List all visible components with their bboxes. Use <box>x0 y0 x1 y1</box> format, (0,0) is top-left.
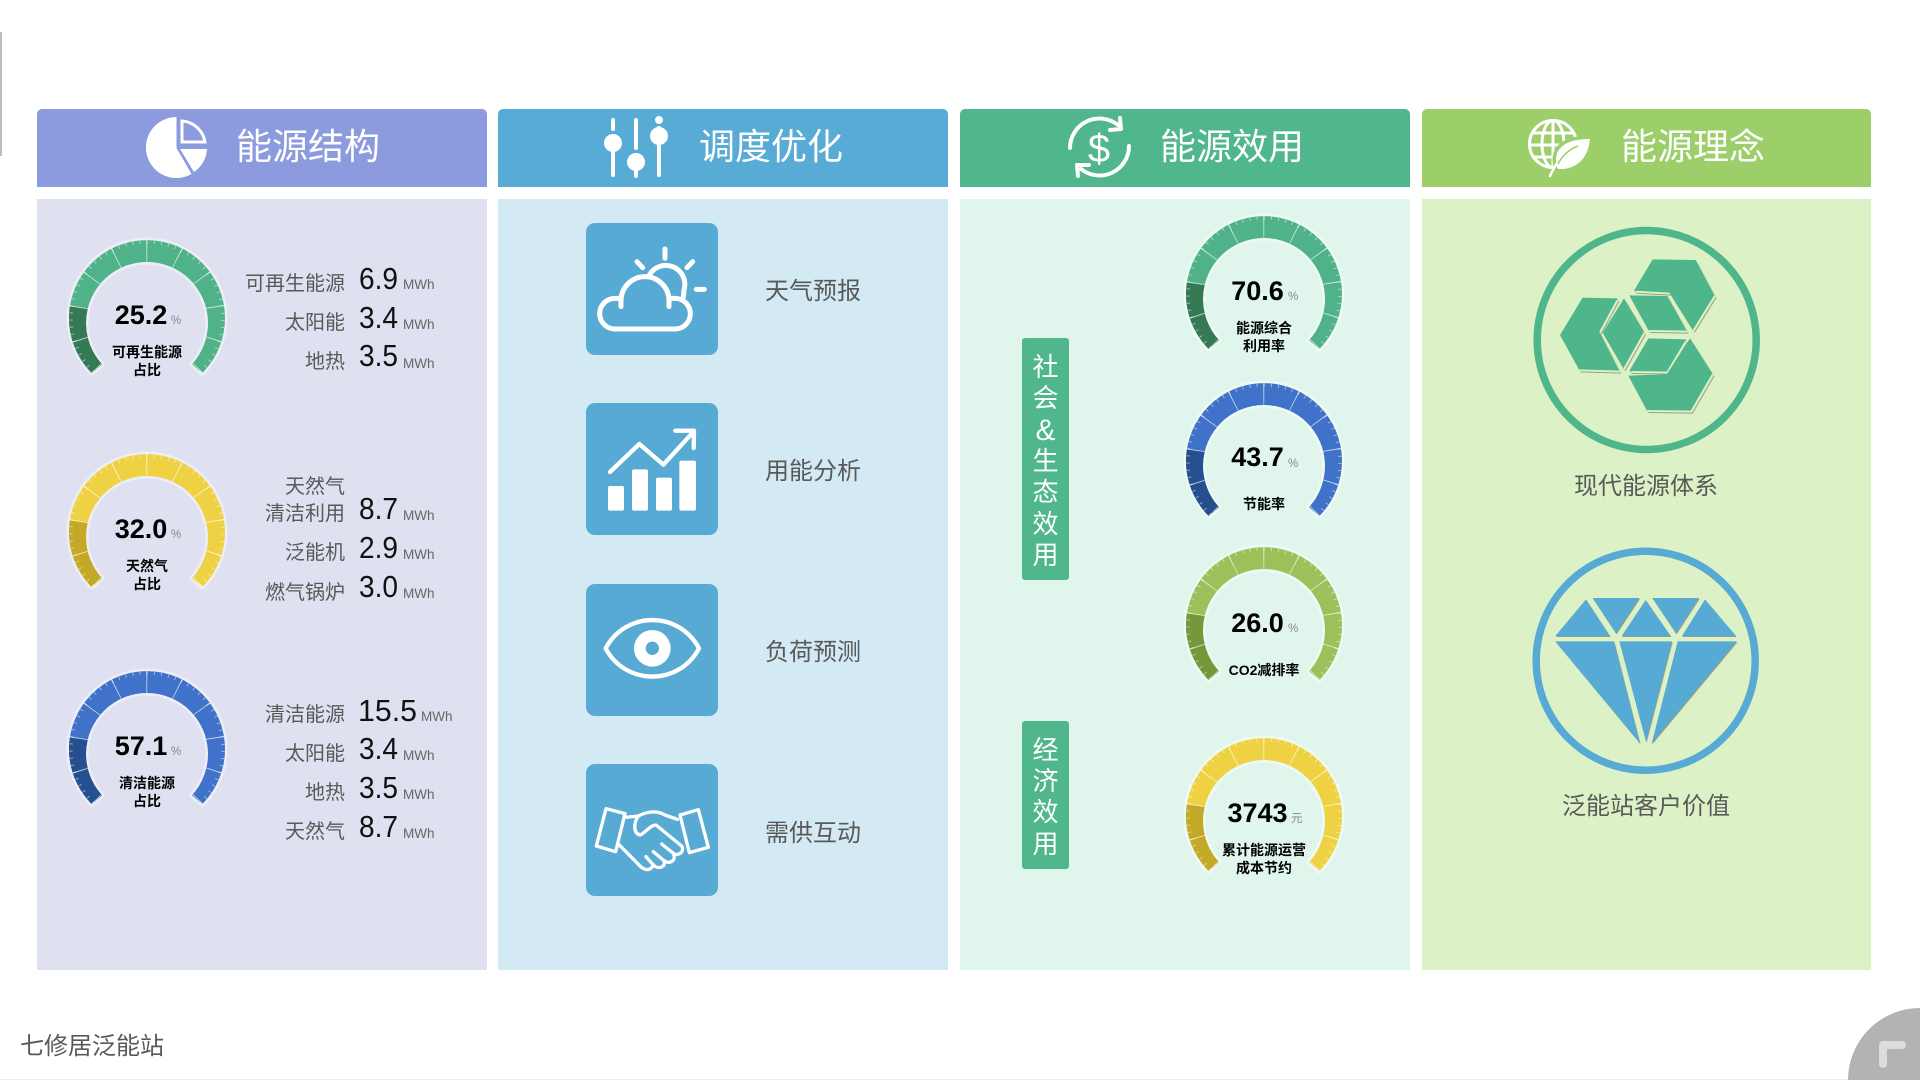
icon: globe and leaf <box>1529 120 1590 176</box>
data rows: renewable: 3.4 <box>359 300 398 335</box>
badge: social and ecological benefit: & <box>1035 414 1056 447</box>
gauge: cumulative cost saving <box>1157 709 1371 923</box>
gauge: clean energy share <box>40 642 254 856</box>
footer text: 七修居泛能站 <box>20 1033 164 1060</box>
badge: social and ecological benefit: 用 <box>1032 540 1059 570</box>
badge: economic benefit <box>1022 721 1069 869</box>
data rows: natural gas: 泛能机 <box>285 541 345 564</box>
label: weather forecast: 天气预报 <box>765 278 861 305</box>
data rows: renewable: 可再生能源 <box>245 272 345 295</box>
gauge: energy saving rate: 43.7 <box>1231 442 1284 472</box>
data rows: clean energy: 3.5 <box>359 770 398 805</box>
badge: social and ecological benefit: 社 <box>1032 352 1059 382</box>
badge: economic benefit: 用 <box>1032 829 1059 859</box>
data rows: renewable: MWh <box>403 356 434 371</box>
label: load forecast: 负荷预测 <box>765 639 861 666</box>
data rows: renewable: 3.5 <box>359 338 398 373</box>
panel: energy efficiency <box>960 109 1410 970</box>
heading: energy philosophy: 能源理念 <box>1621 126 1765 167</box>
data rows: renewable: MWh <box>403 317 434 332</box>
item: supply demand interaction <box>586 764 861 896</box>
gauge: natural gas share: 32.0 <box>115 514 167 544</box>
icon: rising bar chart <box>608 431 696 511</box>
data rows: clean energy: 15.5 <box>358 693 417 728</box>
icon: diamond <box>1555 598 1737 743</box>
data rows: clean energy: MWh <box>403 787 434 802</box>
data rows: natural gas: 清洁利用 <box>265 502 345 525</box>
header: energy efficiency <box>960 109 1410 187</box>
data rows: natural gas <box>265 475 434 604</box>
data rows: clean energy: MWh <box>421 709 452 724</box>
heading: energy efficiency: 能源效用 <box>1160 126 1304 167</box>
gauge: overall energy utilization: 70.6 <box>1231 276 1284 306</box>
gauge: overall energy utilization: 能源综合 <box>1236 320 1292 336</box>
data rows: clean energy: 3.4 <box>359 731 398 766</box>
gauge: cumulative cost saving: 元 <box>1291 813 1303 825</box>
badge: social and ecological benefit: 生 <box>1032 446 1059 476</box>
left edge marker <box>0 32 2 156</box>
item: customer value <box>1536 551 1755 820</box>
gauge: energy saving rate: % <box>1288 458 1298 470</box>
gauge: natural gas share: % <box>171 529 181 541</box>
icon: hexagon cubes <box>1560 259 1714 411</box>
data rows: renewable <box>245 261 434 373</box>
data rows: clean energy: 地热 <box>305 781 345 804</box>
icon: cloud and sun <box>600 249 704 329</box>
icon: handshake <box>596 809 708 870</box>
label: modern energy system: 现代能源体系 <box>1574 473 1718 500</box>
data rows: clean energy: 清洁能源 <box>265 703 345 726</box>
gauge: renewable share: % <box>171 315 181 327</box>
gauge: clean energy share: 57.1 <box>115 731 167 761</box>
gauge: CO2 reduction rate: 26.0 <box>1231 608 1284 638</box>
label: energy use analysis: 用能分析 <box>765 458 861 485</box>
gauge: cumulative cost saving: 成本节约 <box>1236 860 1292 876</box>
data rows: clean energy: MWh <box>403 748 434 763</box>
badge: social and ecological benefit: 态 <box>1032 477 1059 507</box>
item: weather forecast <box>586 223 861 355</box>
data rows: natural gas: 8.7 <box>359 491 398 526</box>
data rows: natural gas: 3.0 <box>359 569 398 604</box>
item: load forecast <box>586 584 861 716</box>
data rows: natural gas: 天然气 <box>285 475 345 498</box>
gauge: energy saving rate: 节能率 <box>1243 496 1285 512</box>
heading: energy structure: 能源结构 <box>236 126 380 167</box>
gauge: renewable share: 可再生能源 <box>112 344 182 360</box>
label: supply demand interaction: 需供互动 <box>765 820 861 847</box>
icon: sliders <box>606 118 666 176</box>
gauge: clean energy share: 清洁能源 <box>119 775 175 791</box>
corner logo <box>0 1008 1920 1080</box>
badge: social and ecological benefit: 会 <box>1032 383 1059 413</box>
gauge: overall energy utilization: 利用率 <box>1243 338 1285 354</box>
gauge: cumulative cost saving: 3743 <box>1227 798 1288 828</box>
badge: economic benefit: 效 <box>1032 797 1059 827</box>
panel: energy philosophy <box>1422 109 1871 970</box>
gauge: energy saving rate <box>1157 354 1371 568</box>
panel: dispatch optimization <box>498 109 948 970</box>
gauge: clean energy share: % <box>171 746 181 758</box>
data rows: clean energy: 天然气 <box>285 820 345 843</box>
gauge: overall energy utilization <box>1157 187 1371 401</box>
item: energy use analysis <box>586 403 861 535</box>
header: energy philosophy <box>1422 109 1871 187</box>
gauge: natural gas share: 天然气 <box>126 558 168 574</box>
data rows: natural gas: MWh <box>403 586 434 601</box>
panel: energy structure <box>37 109 487 970</box>
data rows: clean energy: MWh <box>403 826 434 841</box>
header: dispatch optimization <box>498 109 948 187</box>
gauge: renewable share: 25.2 <box>115 300 167 330</box>
badge: economic benefit: 经 <box>1032 735 1059 765</box>
icon: eye <box>606 620 699 677</box>
data rows: renewable: 太阳能 <box>285 311 345 334</box>
gauge: natural gas share: 占比 <box>133 576 161 592</box>
heading: dispatch optimization: 调度优化 <box>699 126 843 167</box>
badge: economic benefit: 济 <box>1032 766 1059 796</box>
badge: social and ecological benefit: 效 <box>1032 509 1059 539</box>
data rows: natural gas: MWh <box>403 508 434 523</box>
gauge: overall energy utilization: % <box>1288 291 1298 303</box>
gauge: clean energy share: 占比 <box>133 793 161 809</box>
data rows: renewable: 6.9 <box>359 261 398 296</box>
icon: pie chart <box>146 117 207 178</box>
data rows: clean energy: 太阳能 <box>285 742 345 765</box>
gauge: natural gas share <box>40 425 254 639</box>
data rows: renewable: MWh <box>403 277 434 292</box>
icon: dollar cycle <box>1070 118 1129 176</box>
item: modern energy system <box>1537 230 1756 500</box>
gauge: CO2 reduction rate: CO2减排率 <box>1229 662 1299 678</box>
label: customer value: 泛能站客户价值 <box>1562 793 1730 820</box>
data rows: natural gas: 2.9 <box>359 530 398 565</box>
badge: social and ecological benefit <box>1022 338 1069 580</box>
data rows: renewable: 地热 <box>305 350 345 373</box>
gauge: renewable share <box>40 211 254 425</box>
gauge: CO2 reduction rate: % <box>1288 623 1298 635</box>
gauge: cumulative cost saving: 累计能源运营 <box>1222 842 1306 858</box>
data rows: clean energy <box>265 693 452 844</box>
data rows: natural gas: MWh <box>403 547 434 562</box>
icon: dollar cycle: $ <box>1088 127 1110 171</box>
gauge: renewable share: 占比 <box>133 362 161 378</box>
data rows: natural gas: 燃气锅炉 <box>265 581 345 604</box>
header: energy structure <box>37 109 487 187</box>
gauge: CO2 reduction rate <box>1157 518 1371 732</box>
data rows: clean energy: 8.7 <box>359 809 398 844</box>
